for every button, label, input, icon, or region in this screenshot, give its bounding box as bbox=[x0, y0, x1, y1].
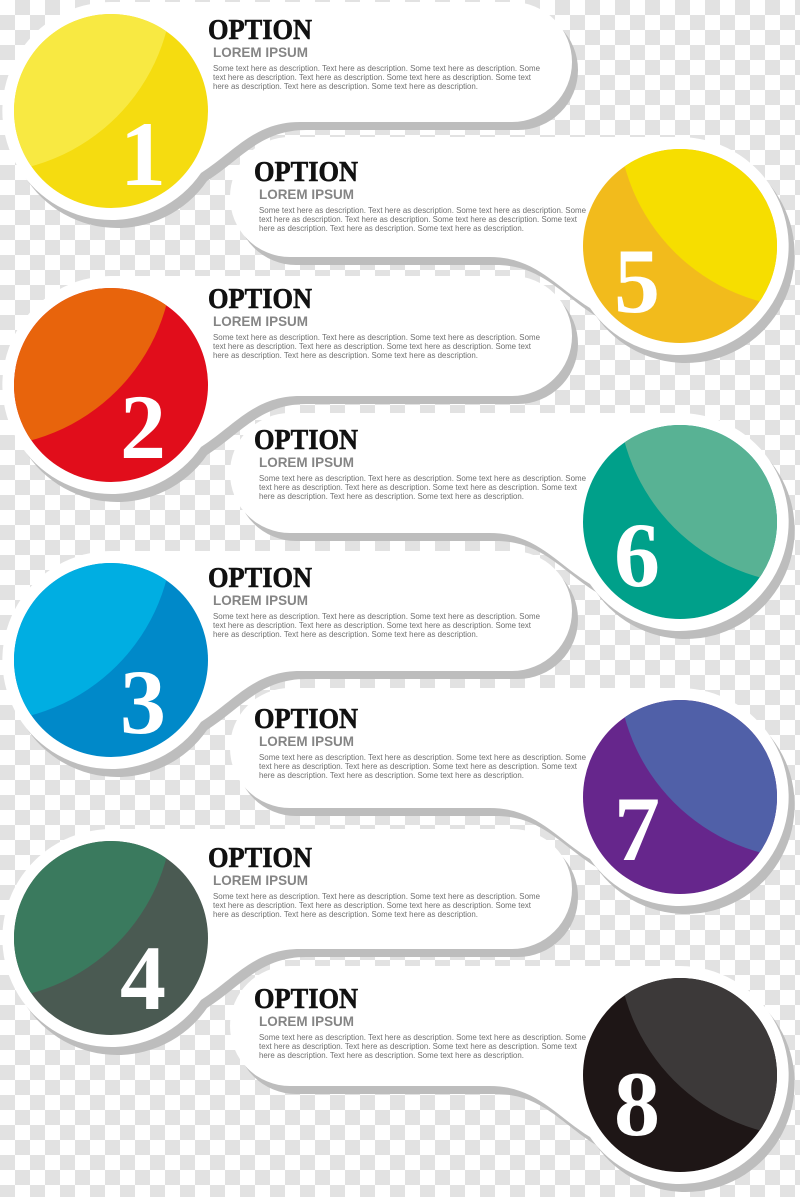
text block 5: LOREM IPSUM bbox=[259, 186, 354, 202]
circle 2 bbox=[14, 288, 208, 482]
text block 3: here as description. Text here as description. Some text here as description. bbox=[213, 630, 478, 639]
text block 7: here as description. Text here as description. Some text here as description. bbox=[259, 771, 524, 780]
text block 7: Some text here as description. Text here as description. Some text here as description. Some bbox=[259, 753, 587, 762]
number 1: 1 bbox=[120, 103, 166, 205]
text block 4: LOREM IPSUM bbox=[213, 872, 308, 888]
text block 8 bbox=[254, 983, 587, 1060]
number 3: 3 bbox=[120, 651, 166, 753]
text block 2: LOREM IPSUM bbox=[213, 313, 308, 329]
text block 3: LOREM IPSUM bbox=[213, 592, 308, 608]
number 2: 2 bbox=[120, 376, 166, 478]
circle 7 bbox=[583, 700, 777, 894]
text block 7: OPTION bbox=[254, 703, 358, 735]
text block 5 bbox=[254, 156, 587, 233]
text block 3: Some text here as description. Text here as description. Some text here as description. Some bbox=[213, 612, 541, 621]
text block 6: here as description. Text here as description. Some text here as description. bbox=[259, 492, 524, 501]
item 7 bbox=[230, 688, 795, 914]
text block 8: Some text here as description. Text here as description. Some text here as description. Some bbox=[259, 1033, 587, 1042]
text block 4: here as description. Text here as description. Some text here as description. bbox=[213, 910, 478, 919]
number 5: 5 bbox=[614, 230, 660, 332]
item 8 bbox=[230, 966, 795, 1192]
text block 3: OPTION bbox=[208, 562, 312, 594]
item 4 bbox=[2, 829, 578, 1055]
text block 2: Some text here as description. Text here as description. Some text here as description. Some bbox=[213, 333, 541, 342]
text block 2: here as description. Text here as description. Some text here as description. bbox=[213, 351, 478, 360]
text block 5: here as description. Text here as description. Some text here as description. bbox=[259, 224, 524, 233]
number 8: 8 bbox=[614, 1053, 660, 1155]
text block 2: OPTION bbox=[208, 283, 312, 315]
text block 7: text here as description. Text here as description. Some text here as description. Some text bbox=[259, 762, 578, 771]
circle 3 bbox=[14, 563, 208, 757]
text block 6: text here as description. Text here as description. Some text here as description. Some text bbox=[259, 483, 578, 492]
text block 4: text here as description. Text here as description. Some text here as description. Some text bbox=[213, 901, 532, 910]
text block 5: text here as description. Text here as description. Some text here as description. Some text bbox=[259, 215, 578, 224]
text block 6: Some text here as description. Text here as description. Some text here as description. Some bbox=[259, 474, 587, 483]
item 3 bbox=[2, 551, 578, 777]
item 1 bbox=[0, 0, 578, 228]
number 6: 6 bbox=[614, 504, 660, 606]
item 2 bbox=[2, 276, 578, 502]
text block 1: here as description. Text here as description. Some text here as description. bbox=[213, 82, 478, 91]
text block 5: Some text here as description. Text here as description. Some text here as description. Some bbox=[259, 206, 587, 215]
text block 6: OPTION bbox=[254, 424, 358, 456]
number 7: 7 bbox=[614, 778, 660, 880]
text block 8: here as description. Text here as description. Some text here as description. bbox=[259, 1051, 524, 1060]
circle 6 bbox=[583, 425, 777, 619]
text block 7 bbox=[254, 703, 587, 780]
text block 1: Some text here as description. Text here as description. Some text here as description. Some bbox=[213, 64, 541, 73]
circle 4 bbox=[14, 841, 208, 1035]
number 4: 4 bbox=[120, 927, 166, 1029]
text block 4: Some text here as description. Text here as description. Some text here as description. Some bbox=[213, 892, 541, 901]
text block 6 bbox=[254, 424, 587, 501]
text block 8: OPTION bbox=[254, 983, 358, 1015]
text block 2: text here as description. Text here as description. Some text here as description. Some text bbox=[213, 342, 532, 351]
text block 8: text here as description. Text here as description. Some text here as description. Some text bbox=[259, 1042, 578, 1051]
text block 3 bbox=[208, 562, 541, 639]
circle 1 bbox=[14, 14, 208, 208]
text block 1: text here as description. Text here as description. Some text here as description. Some text bbox=[213, 73, 532, 82]
circle 5 bbox=[583, 149, 777, 343]
text block 4: OPTION bbox=[208, 842, 312, 874]
item 6 bbox=[230, 413, 795, 639]
text block 5: OPTION bbox=[254, 156, 358, 188]
text block 1: LOREM IPSUM bbox=[213, 44, 308, 60]
circle 8 bbox=[583, 978, 777, 1172]
text block 1 bbox=[208, 14, 541, 91]
text block 3: text here as description. Text here as description. Some text here as description. Some text bbox=[213, 621, 532, 630]
item 5 bbox=[230, 137, 795, 363]
text block 8: LOREM IPSUM bbox=[259, 1013, 354, 1029]
text block 4 bbox=[208, 842, 541, 919]
text block 7: LOREM IPSUM bbox=[259, 733, 354, 749]
text block 1: OPTION bbox=[208, 14, 312, 46]
text block 2 bbox=[208, 283, 541, 360]
text block 6: LOREM IPSUM bbox=[259, 454, 354, 470]
